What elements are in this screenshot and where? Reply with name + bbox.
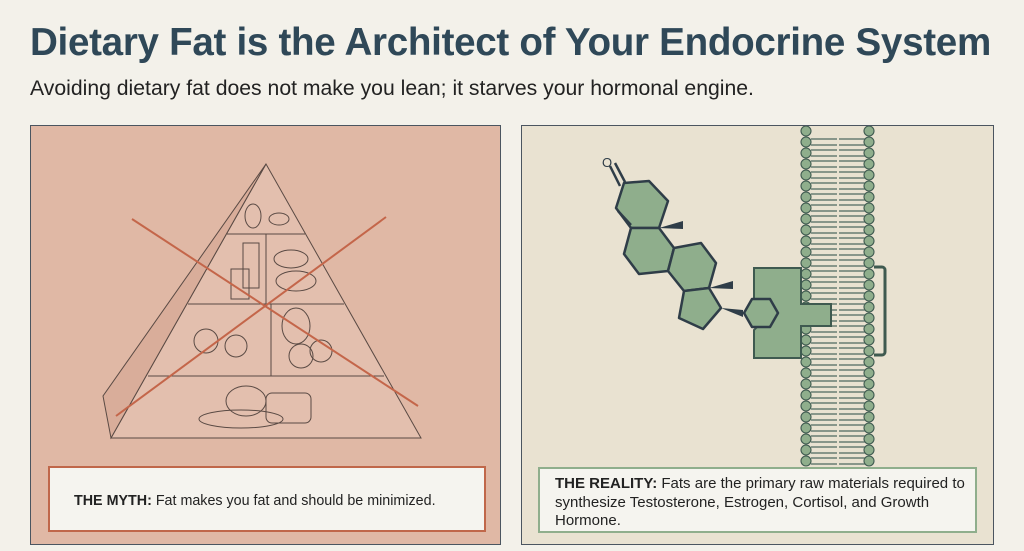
receptor (754, 268, 831, 358)
reality callout: THE REALITY: Fats are the primary raw materials required to synthesize Testosterone, Estrogen, Cortisol, and Growth Hormone. (555, 475, 965, 529)
steroid and membrane illustration (602, 126, 886, 466)
myth callout: THE MYTH: Fat makes you fat and should be minimized. (74, 493, 436, 509)
panel: reality (521, 125, 994, 545)
subtitle: Avoiding dietary fat does not make you lean; it starves your hormonal engine. (30, 77, 754, 100)
receptor bracket (874, 267, 885, 355)
cross-out (116, 217, 418, 416)
steroid and membrane illustration: O (602, 155, 612, 170)
panel: myth (30, 125, 501, 545)
steroid molecule (610, 163, 778, 329)
title: Dietary Fat is the Architect of Your Endocrine System (30, 21, 991, 64)
myth callout (48, 466, 486, 532)
pyramid illustration (102, 163, 422, 440)
